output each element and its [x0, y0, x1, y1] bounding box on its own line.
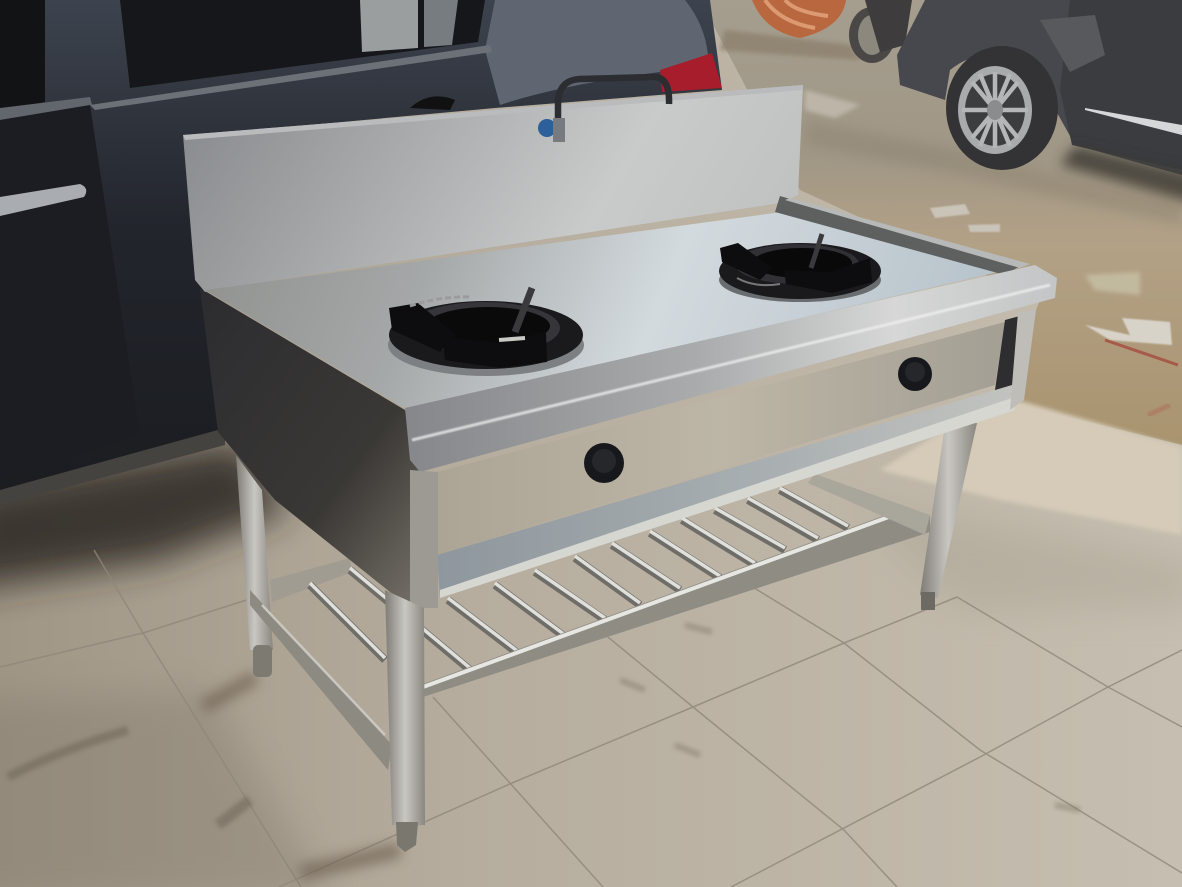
front burner — [388, 288, 584, 376]
backsplash — [183, 85, 803, 292]
floor stains — [8, 730, 128, 777]
front panel — [437, 322, 1005, 555]
car on the left — [0, 0, 722, 505]
tail light — [660, 53, 722, 92]
leg shadows — [203, 677, 256, 707]
front left corner post — [410, 470, 438, 608]
back right leg — [920, 423, 977, 598]
rear burner — [719, 234, 881, 302]
front edge strip — [405, 265, 1057, 472]
rear control knob — [898, 357, 932, 391]
front left leg — [385, 590, 425, 825]
shelf slats — [310, 490, 848, 670]
front control knob — [584, 443, 624, 483]
car on the right — [897, 0, 1182, 205]
rear legs and under-shelf — [236, 423, 977, 770]
left ladder rails — [250, 590, 392, 770]
cooktop surface — [205, 212, 1015, 410]
stove body — [183, 85, 1057, 852]
faucet — [538, 77, 669, 142]
upper car rear panel — [485, 0, 708, 105]
car door handle — [0, 184, 86, 216]
car wheel — [946, 46, 1058, 170]
shelf lip — [437, 385, 1012, 598]
back left leg — [236, 455, 273, 650]
car side window — [120, 0, 485, 88]
panel: left dark side — [200, 288, 438, 608]
dusty ground outside — [700, 0, 1182, 535]
front shelf rail — [423, 508, 930, 697]
orange hose and motorbike — [752, 0, 912, 63]
